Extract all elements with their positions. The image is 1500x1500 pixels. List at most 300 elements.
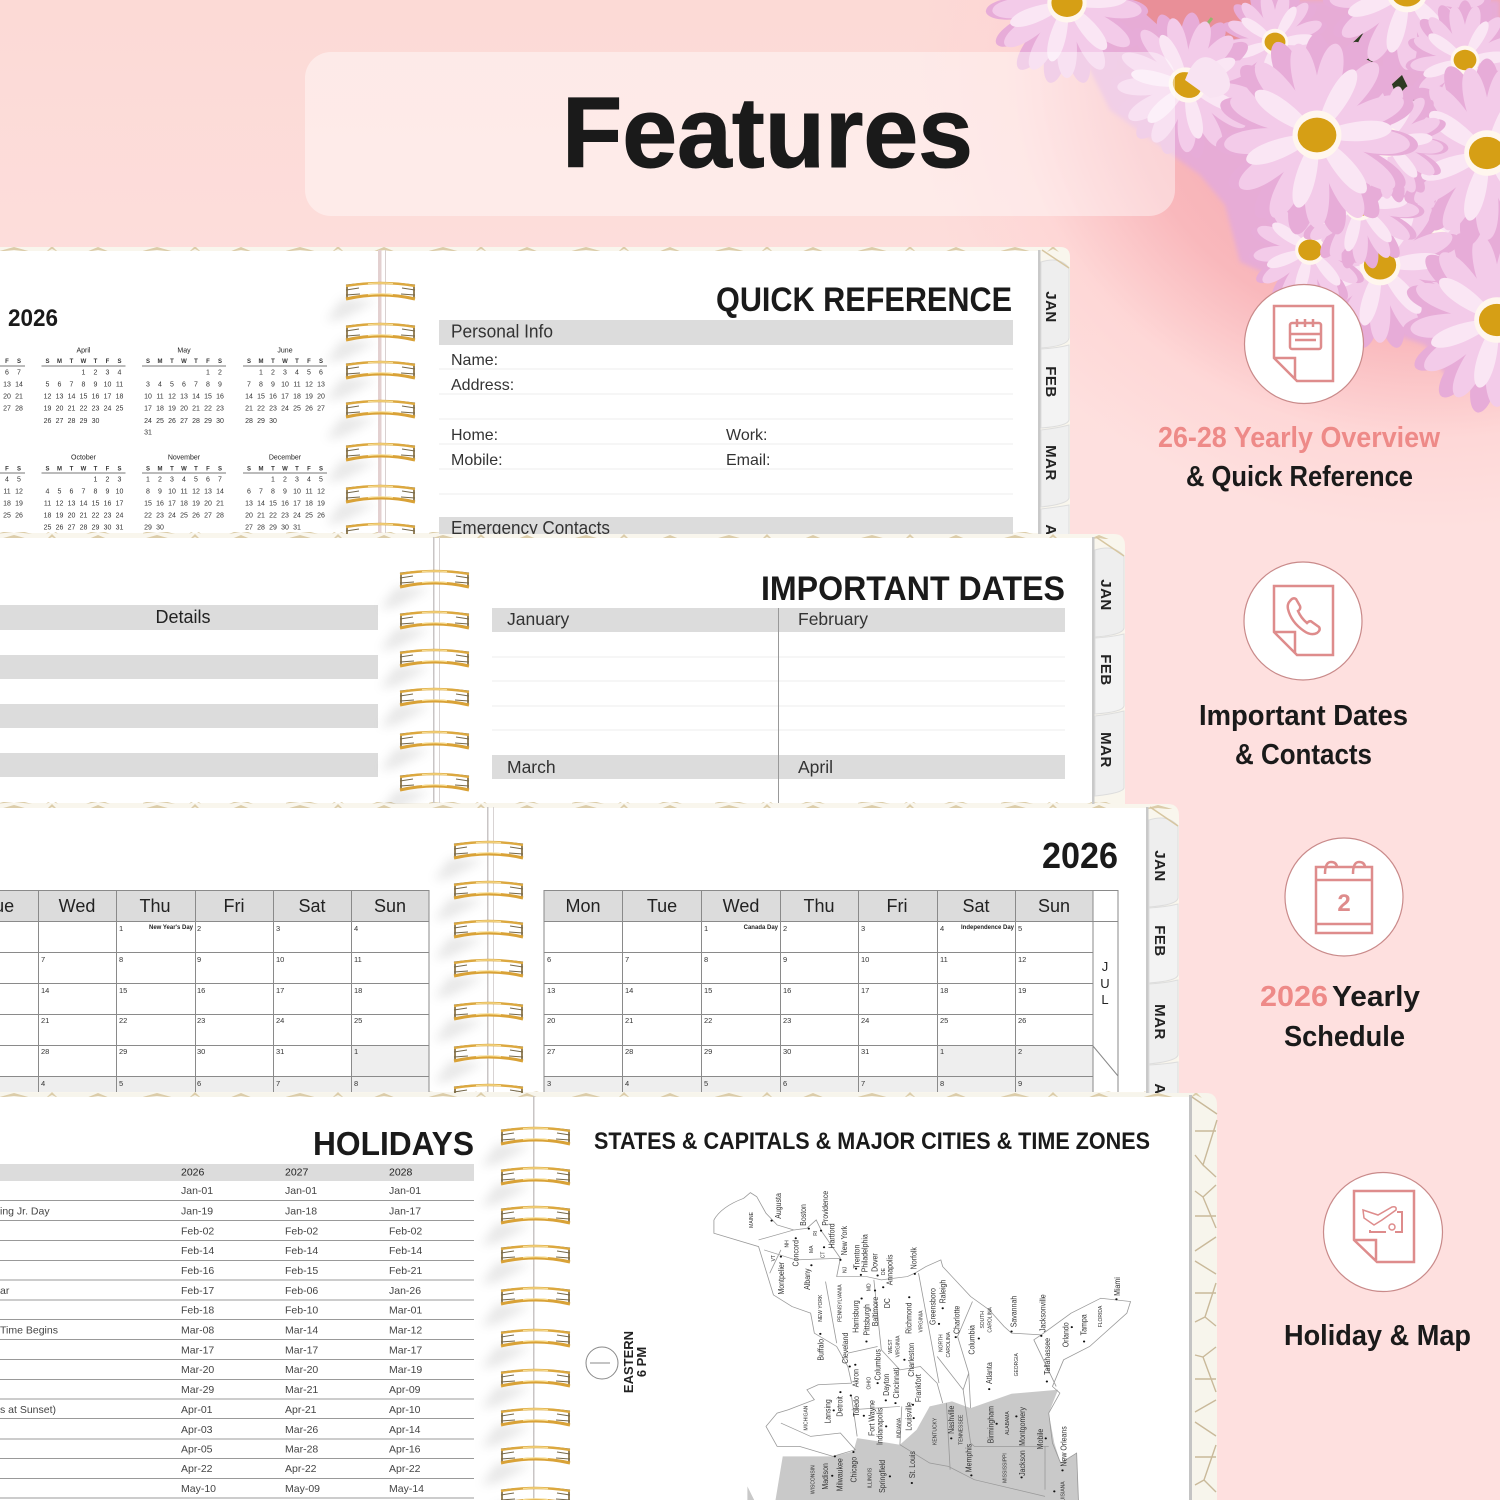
left month table: Sat xyxy=(298,896,326,916)
rotated US map: Providence xyxy=(820,1191,830,1226)
calendar December: 8 xyxy=(271,488,275,496)
rotated US map: Concord xyxy=(791,1240,801,1266)
calendar May: 20 xyxy=(180,406,188,412)
calendar June: T xyxy=(295,359,299,365)
calendar October: 17 xyxy=(116,500,123,508)
holidays table: Apr-16 xyxy=(389,1444,421,1456)
year heading 2026: 2026 xyxy=(8,305,58,332)
calendar April: 8 xyxy=(82,382,86,388)
partial calendar September xyxy=(0,466,25,520)
calendar December: 20 xyxy=(245,512,253,520)
feature 2: important dates and contacts xyxy=(1199,561,1408,771)
holidays table: Mar-01 xyxy=(389,1304,422,1316)
rotated US map: Mobile xyxy=(1036,1429,1045,1449)
right month table: Thu xyxy=(803,896,835,916)
calendar November: 26 xyxy=(192,512,200,520)
calendar April: 18 xyxy=(116,394,123,400)
rotated US map: RI xyxy=(813,1231,819,1236)
calendar November: 1 xyxy=(146,476,150,484)
calendar May: W xyxy=(181,359,187,365)
calendar May: T xyxy=(170,359,174,365)
rotated US map: Trenton xyxy=(852,1245,861,1268)
month tabs: JAN xyxy=(1097,579,1114,611)
icon: notes page xyxy=(1244,284,1364,404)
rotated US map: CT xyxy=(820,1251,827,1258)
calendar November: W xyxy=(181,466,187,472)
calendar May: 4 xyxy=(158,382,162,388)
personal info form xyxy=(439,320,1013,494)
right month table: 17 xyxy=(861,986,869,995)
rotated US map: Cincinnati xyxy=(892,1367,901,1398)
calendar May: 14 xyxy=(192,394,200,400)
rotated US map: Savannah xyxy=(1009,1296,1018,1327)
calendar May: 29 xyxy=(204,418,212,425)
holidays table: Feb-10 xyxy=(285,1304,318,1316)
calendar April xyxy=(42,348,126,425)
left month table: 9 xyxy=(197,955,201,964)
right month table: 9 xyxy=(1018,1079,1022,1088)
partial calendar September: 12 xyxy=(15,488,23,496)
holidays table: Feb-02 xyxy=(285,1226,318,1238)
calendar November: 11 xyxy=(180,488,188,496)
left month table: 1 xyxy=(119,924,123,933)
holidays table: Feb-14 xyxy=(285,1245,318,1257)
rotated US map: Charleston xyxy=(907,1343,916,1377)
right month table: 4 xyxy=(940,924,944,933)
holidays table: Mar-20 xyxy=(285,1364,318,1376)
right month table: 18 xyxy=(940,986,948,995)
rotated US map: Tallahassee xyxy=(1042,1338,1052,1375)
calendar June: 28 xyxy=(245,418,253,425)
calendar October: 29 xyxy=(92,524,99,532)
calendar May: M xyxy=(158,359,162,365)
right month table: Sun xyxy=(1038,896,1070,916)
holidays table: Feb-06 xyxy=(285,1285,318,1297)
left month table: 6 xyxy=(197,1079,201,1088)
caption line 2: & Quick Reference xyxy=(1186,461,1413,493)
calendar June: S xyxy=(247,359,251,365)
calendar November: 23 xyxy=(156,512,164,520)
left month table xyxy=(0,890,429,1092)
calendar June: 15 xyxy=(257,394,265,400)
holidays table: Feb-02 xyxy=(389,1226,422,1238)
calendar December: 5 xyxy=(319,476,323,484)
personal info form: Home: xyxy=(451,427,498,444)
partial calendar March: S xyxy=(17,359,21,365)
calendar April: 12 xyxy=(44,394,51,400)
calendar June: 20 xyxy=(317,394,325,400)
right month table: 8 xyxy=(704,955,708,964)
right month table: 23 xyxy=(783,1016,791,1025)
calendar December: M xyxy=(258,466,264,472)
rotated US map: Madison xyxy=(820,1463,830,1490)
holidays table: Mar-29 xyxy=(181,1384,214,1396)
right month table: Tue xyxy=(647,896,677,916)
calendar June: M xyxy=(258,359,264,365)
right month table: 3 xyxy=(861,924,865,933)
rotated US map: Raleigh xyxy=(938,1280,948,1303)
right month table: 6 xyxy=(547,955,551,964)
calendar May: 31 xyxy=(144,430,152,436)
calendar November: T xyxy=(194,466,198,472)
holidays table: Apr-22 xyxy=(389,1463,421,1475)
rotated US map: Birmingham xyxy=(986,1406,995,1443)
left month table: Fri xyxy=(224,896,244,916)
calendar October: 13 xyxy=(68,500,75,508)
calendar December: 14 xyxy=(257,500,265,508)
calendar December: 18 xyxy=(305,500,313,508)
rotated US map: PENNSYLVANIA xyxy=(837,1284,844,1322)
calendar May xyxy=(142,348,226,436)
right month table: 26 xyxy=(1018,1016,1026,1025)
calendar October: T xyxy=(94,466,98,472)
month tabs xyxy=(1095,537,1124,796)
rotated US map: Hartford xyxy=(827,1223,837,1249)
calendar April: 28 xyxy=(68,418,75,425)
right month table: 5 xyxy=(704,1079,708,1088)
right month table: 25 xyxy=(940,1016,948,1025)
rotated US map: Cleveland xyxy=(841,1333,850,1364)
left month table: Sun xyxy=(374,896,406,916)
holidays table: 2027 xyxy=(285,1166,309,1178)
partial calendar September: 4 xyxy=(5,476,9,484)
calendar November: 29 xyxy=(144,524,152,532)
calendar June: 26 xyxy=(305,406,313,412)
calendar November: 28 xyxy=(216,512,224,520)
rotated US map: Milwaukee xyxy=(835,1458,844,1491)
left month table: 23 xyxy=(197,1016,205,1025)
calendar May: 8 xyxy=(206,382,210,388)
left month table: 5 xyxy=(119,1079,123,1088)
calendar June: 29 xyxy=(257,418,265,425)
calendar April: 10 xyxy=(104,382,111,388)
rotated US map: St. Louis xyxy=(908,1451,917,1478)
contacts details table: Details xyxy=(155,607,211,627)
calendar June: 21 xyxy=(245,406,253,412)
right month table: Wed xyxy=(723,896,759,916)
rotated US map: Springfield xyxy=(878,1460,887,1493)
left month table: 11 xyxy=(354,955,362,964)
calendar May: 13 xyxy=(180,394,188,400)
rotated US map: Annapolis xyxy=(885,1254,895,1285)
calendar December: T xyxy=(295,466,299,472)
calendar October: 12 xyxy=(56,500,63,508)
calendar June: June xyxy=(277,348,293,354)
calendar December: 9 xyxy=(283,488,287,496)
calendar May: 22 xyxy=(204,406,212,412)
month tabs: MAR xyxy=(1042,445,1059,481)
calendar November: S xyxy=(146,466,150,472)
calendar November: 30 xyxy=(156,524,164,532)
right month table: Fri xyxy=(886,896,908,916)
calendar June: 25 xyxy=(293,406,301,412)
calendar November: 10 xyxy=(168,488,176,496)
calendar November: 15 xyxy=(144,500,152,508)
calendar October: 8 xyxy=(94,488,98,496)
calendar November: 6 xyxy=(206,476,210,484)
left month table: 4 xyxy=(354,924,358,933)
right month table: 10 xyxy=(861,955,869,964)
calendar May: 25 xyxy=(156,418,164,425)
rotated US map: Orlando xyxy=(1061,1322,1071,1347)
left month table: 22 xyxy=(119,1016,127,1025)
right month table: 3 xyxy=(547,1079,551,1088)
holidays table: Mar-17 xyxy=(285,1344,318,1356)
right month table: 13 xyxy=(547,986,555,995)
rotated US map: CAROLINA xyxy=(946,1332,952,1358)
calendar November: S xyxy=(218,466,222,472)
rotated US map: Baltimore xyxy=(871,1297,880,1326)
holidays table: May-10 xyxy=(181,1483,216,1495)
month tabs: JAN xyxy=(1151,850,1168,882)
calendar December: 6 xyxy=(247,488,251,496)
right month table: Sat xyxy=(962,896,990,916)
calendar June: 9 xyxy=(271,382,275,388)
left month table: 15 xyxy=(119,986,127,995)
calendar April: April xyxy=(76,348,91,354)
calendar December: 12 xyxy=(317,488,325,496)
spiral rings xyxy=(326,283,415,562)
holidays table: Mar-12 xyxy=(389,1324,422,1336)
right month table: 2 xyxy=(1018,1047,1022,1056)
calendar November: 21 xyxy=(216,500,224,508)
rotated US map: VIRGINIA xyxy=(918,1310,925,1332)
holidays table: Time Begins xyxy=(0,1324,58,1336)
calendar June: 24 xyxy=(281,406,289,412)
personal info form: Mobile: xyxy=(451,452,503,469)
rotated US map: WEST xyxy=(888,1339,894,1354)
calendar October: 1 xyxy=(94,476,98,484)
calendar June xyxy=(243,348,327,425)
calendar October: 23 xyxy=(104,512,111,520)
title panel xyxy=(305,52,1175,216)
calendar December: 29 xyxy=(269,524,277,532)
feature 3: 2026 yearly schedule xyxy=(1260,837,1420,1053)
left month table: 10 xyxy=(276,955,284,964)
right month table: J xyxy=(1102,959,1108,974)
holidays table: Feb-15 xyxy=(285,1265,318,1277)
calendar April: 15 xyxy=(80,394,87,400)
left month table: 8 xyxy=(354,1079,358,1088)
holidays table: Mar-19 xyxy=(389,1364,422,1376)
heading: quick reference: QUICK REFERENCE xyxy=(716,281,1012,319)
heading: holidays: HOLIDAYS xyxy=(313,1125,474,1162)
title: Features xyxy=(562,77,973,189)
holidays table: Apr-03 xyxy=(181,1424,213,1436)
rotated US map: Pittsburgh xyxy=(862,1304,872,1336)
calendar October: 15 xyxy=(92,500,99,508)
rotated US map: MISSISSIPPI xyxy=(1002,1453,1008,1483)
right month table: 8 xyxy=(940,1079,944,1088)
calendar October: 2 xyxy=(106,476,110,484)
holidays table: Apr-21 xyxy=(285,1404,317,1416)
calendar April: 29 xyxy=(80,418,87,425)
holidays table: Feb-18 xyxy=(181,1304,214,1316)
calendar April: 24 xyxy=(104,406,111,412)
icon: desk calendar: 2 xyxy=(1337,890,1351,917)
holidays table: Mar-28 xyxy=(285,1444,318,1456)
heading: important dates: IMPORTANT DATES xyxy=(761,570,1065,608)
rotated US map: MD xyxy=(866,1283,873,1291)
rotated US map: DC xyxy=(883,1298,892,1308)
emergency contacts bar xyxy=(439,517,1013,538)
left month table: 21 xyxy=(41,1016,49,1025)
calendar October: 16 xyxy=(104,500,111,508)
calendar October: 20 xyxy=(68,512,75,520)
calendar December: W xyxy=(282,466,288,472)
rotated US map: Frankfort xyxy=(913,1374,923,1402)
holidays table: Feb-21 xyxy=(389,1265,422,1277)
calendar November: 16 xyxy=(156,500,164,508)
right month table: 19 xyxy=(1018,986,1026,995)
rotated US map: NEW YORK xyxy=(818,1294,824,1322)
calendar May: 27 xyxy=(180,418,188,425)
month tabs: MAR xyxy=(1151,1004,1168,1040)
calendar June: 27 xyxy=(317,406,325,412)
spiral rings xyxy=(434,842,523,1123)
personal info form: Email: xyxy=(726,452,770,469)
holidays table: Mar-26 xyxy=(285,1424,318,1436)
calendar June: 5 xyxy=(307,370,311,376)
holidays table: Jan-19 xyxy=(181,1206,213,1218)
calendar May: 26 xyxy=(168,418,176,425)
calendar April: 3 xyxy=(106,370,110,376)
calendar November: 27 xyxy=(204,512,212,520)
month tabs: MAR xyxy=(1097,732,1114,768)
notebook 3: 2026 yearly schedule xyxy=(0,804,1179,1096)
calendar December xyxy=(243,454,327,532)
partial calendar March: 14 xyxy=(15,382,23,388)
calendar May: S xyxy=(218,359,222,365)
calendar December: 24 xyxy=(293,512,301,520)
left month table: New Year's Day xyxy=(149,925,194,931)
calendar November: 3 xyxy=(170,476,174,484)
calendar November: 13 xyxy=(204,488,212,496)
left month table: 14 xyxy=(41,986,49,995)
rotated US map xyxy=(714,1191,1131,1500)
calendar October: 4 xyxy=(46,488,50,496)
left month table: 4 xyxy=(41,1079,45,1088)
calendar November: M xyxy=(158,466,162,472)
rotated US map: GEORGIA xyxy=(1014,1353,1020,1376)
left month table: 25 xyxy=(354,1016,362,1025)
spine xyxy=(378,250,386,533)
holidays table: Jan-17 xyxy=(389,1206,421,1218)
holidays table: Apr-01 xyxy=(181,1404,213,1416)
holidays table: 2026 xyxy=(181,1166,205,1178)
rotated US map: SOUTH xyxy=(980,1311,986,1329)
calendar April: T xyxy=(70,359,74,365)
calendar November: 2 xyxy=(158,476,162,484)
partial calendar September: F xyxy=(5,466,9,472)
holidays table: Jan-18 xyxy=(285,1206,317,1218)
calendar May: 11 xyxy=(156,394,164,400)
calendar November xyxy=(142,454,226,532)
right month table: 7 xyxy=(861,1079,865,1088)
rotated US map: WISCONSIN xyxy=(811,1465,817,1494)
spine xyxy=(533,1096,534,1500)
rotated US map: Indianapolis xyxy=(875,1407,885,1445)
calendar June: 17 xyxy=(281,394,289,400)
holidays table: Mar-08 xyxy=(181,1324,214,1336)
calendar December: 25 xyxy=(305,512,313,520)
important dates month grid: January xyxy=(507,609,570,629)
holidays table: Mar-21 xyxy=(285,1384,318,1396)
time zone clock: eastern xyxy=(586,1331,649,1393)
right month table: 14 xyxy=(625,986,633,995)
rotated US map: DE xyxy=(881,1268,887,1275)
calendar November: 20 xyxy=(204,500,212,508)
rotated US map: Boston xyxy=(799,1204,808,1226)
calendar April: 14 xyxy=(68,394,75,400)
calendar December: 23 xyxy=(281,512,289,520)
partial calendar March: 20 xyxy=(3,394,11,400)
calendar December: T xyxy=(271,466,275,472)
calendar June: F xyxy=(307,359,311,365)
holidays table: Apr-22 xyxy=(285,1463,317,1475)
calendar April: M xyxy=(57,359,62,365)
time zone clock: eastern: 6 PM xyxy=(634,1347,649,1377)
cover crackle pattern xyxy=(1192,1097,1217,1492)
rotated US map: Chicago xyxy=(849,1457,859,1483)
rotated US map: Buffalo xyxy=(816,1339,826,1361)
holidays table: Mar-14 xyxy=(285,1324,318,1336)
right month table: 1 xyxy=(704,924,708,933)
partial calendar March: F xyxy=(5,359,9,365)
right month table: Independence Day xyxy=(961,925,1015,931)
calendar October: October xyxy=(71,454,97,462)
calendar May: 2 xyxy=(218,370,222,376)
calendar May: 30 xyxy=(216,418,224,425)
calendar April: 23 xyxy=(92,406,99,412)
left month table: 31 xyxy=(276,1047,284,1056)
icon: phone on page xyxy=(1244,562,1362,680)
calendar April: 6 xyxy=(58,382,62,388)
right month table: 4 xyxy=(625,1079,629,1088)
time zone clock: eastern: EASTERN xyxy=(621,1331,636,1393)
calendar December: 1 xyxy=(271,476,275,484)
holidays table: Mar-17 xyxy=(181,1344,214,1356)
partial calendar March: 13 xyxy=(3,382,11,388)
calendar April: 2 xyxy=(94,370,98,376)
holidays table: Apr-05 xyxy=(181,1444,213,1456)
left month table: 8 xyxy=(119,955,123,964)
rotated US map: KENTUCKY xyxy=(932,1417,938,1445)
calendar June: 14 xyxy=(245,394,253,400)
partial calendar September: 26 xyxy=(15,512,23,520)
holidays table xyxy=(0,1164,474,1498)
heading: year 2026: 2026 xyxy=(1042,835,1118,876)
rotated US map: Dayton xyxy=(881,1374,891,1396)
calendar December: 31 xyxy=(293,524,301,532)
rotated US map: Richmond xyxy=(904,1302,914,1334)
calendar December: 28 xyxy=(257,524,265,532)
right month table: 20 xyxy=(547,1016,555,1025)
rotated US map: ALABAMA xyxy=(1005,1411,1011,1435)
right month table: 2 xyxy=(783,924,787,933)
calendar November: 24 xyxy=(168,512,176,520)
calendar May: 19 xyxy=(168,406,176,412)
rotated US map: New York xyxy=(840,1226,849,1255)
calendar October: 11 xyxy=(44,500,51,508)
calendar April: 22 xyxy=(80,406,87,412)
calendar April: 27 xyxy=(56,418,63,425)
rotated US map: Montgomery xyxy=(1018,1407,1027,1446)
rotated US map: Memphis xyxy=(964,1444,974,1472)
holidays table: Feb-16 xyxy=(181,1265,214,1277)
holidays table: Jan-26 xyxy=(389,1285,421,1297)
calendar June: 22 xyxy=(257,406,265,412)
